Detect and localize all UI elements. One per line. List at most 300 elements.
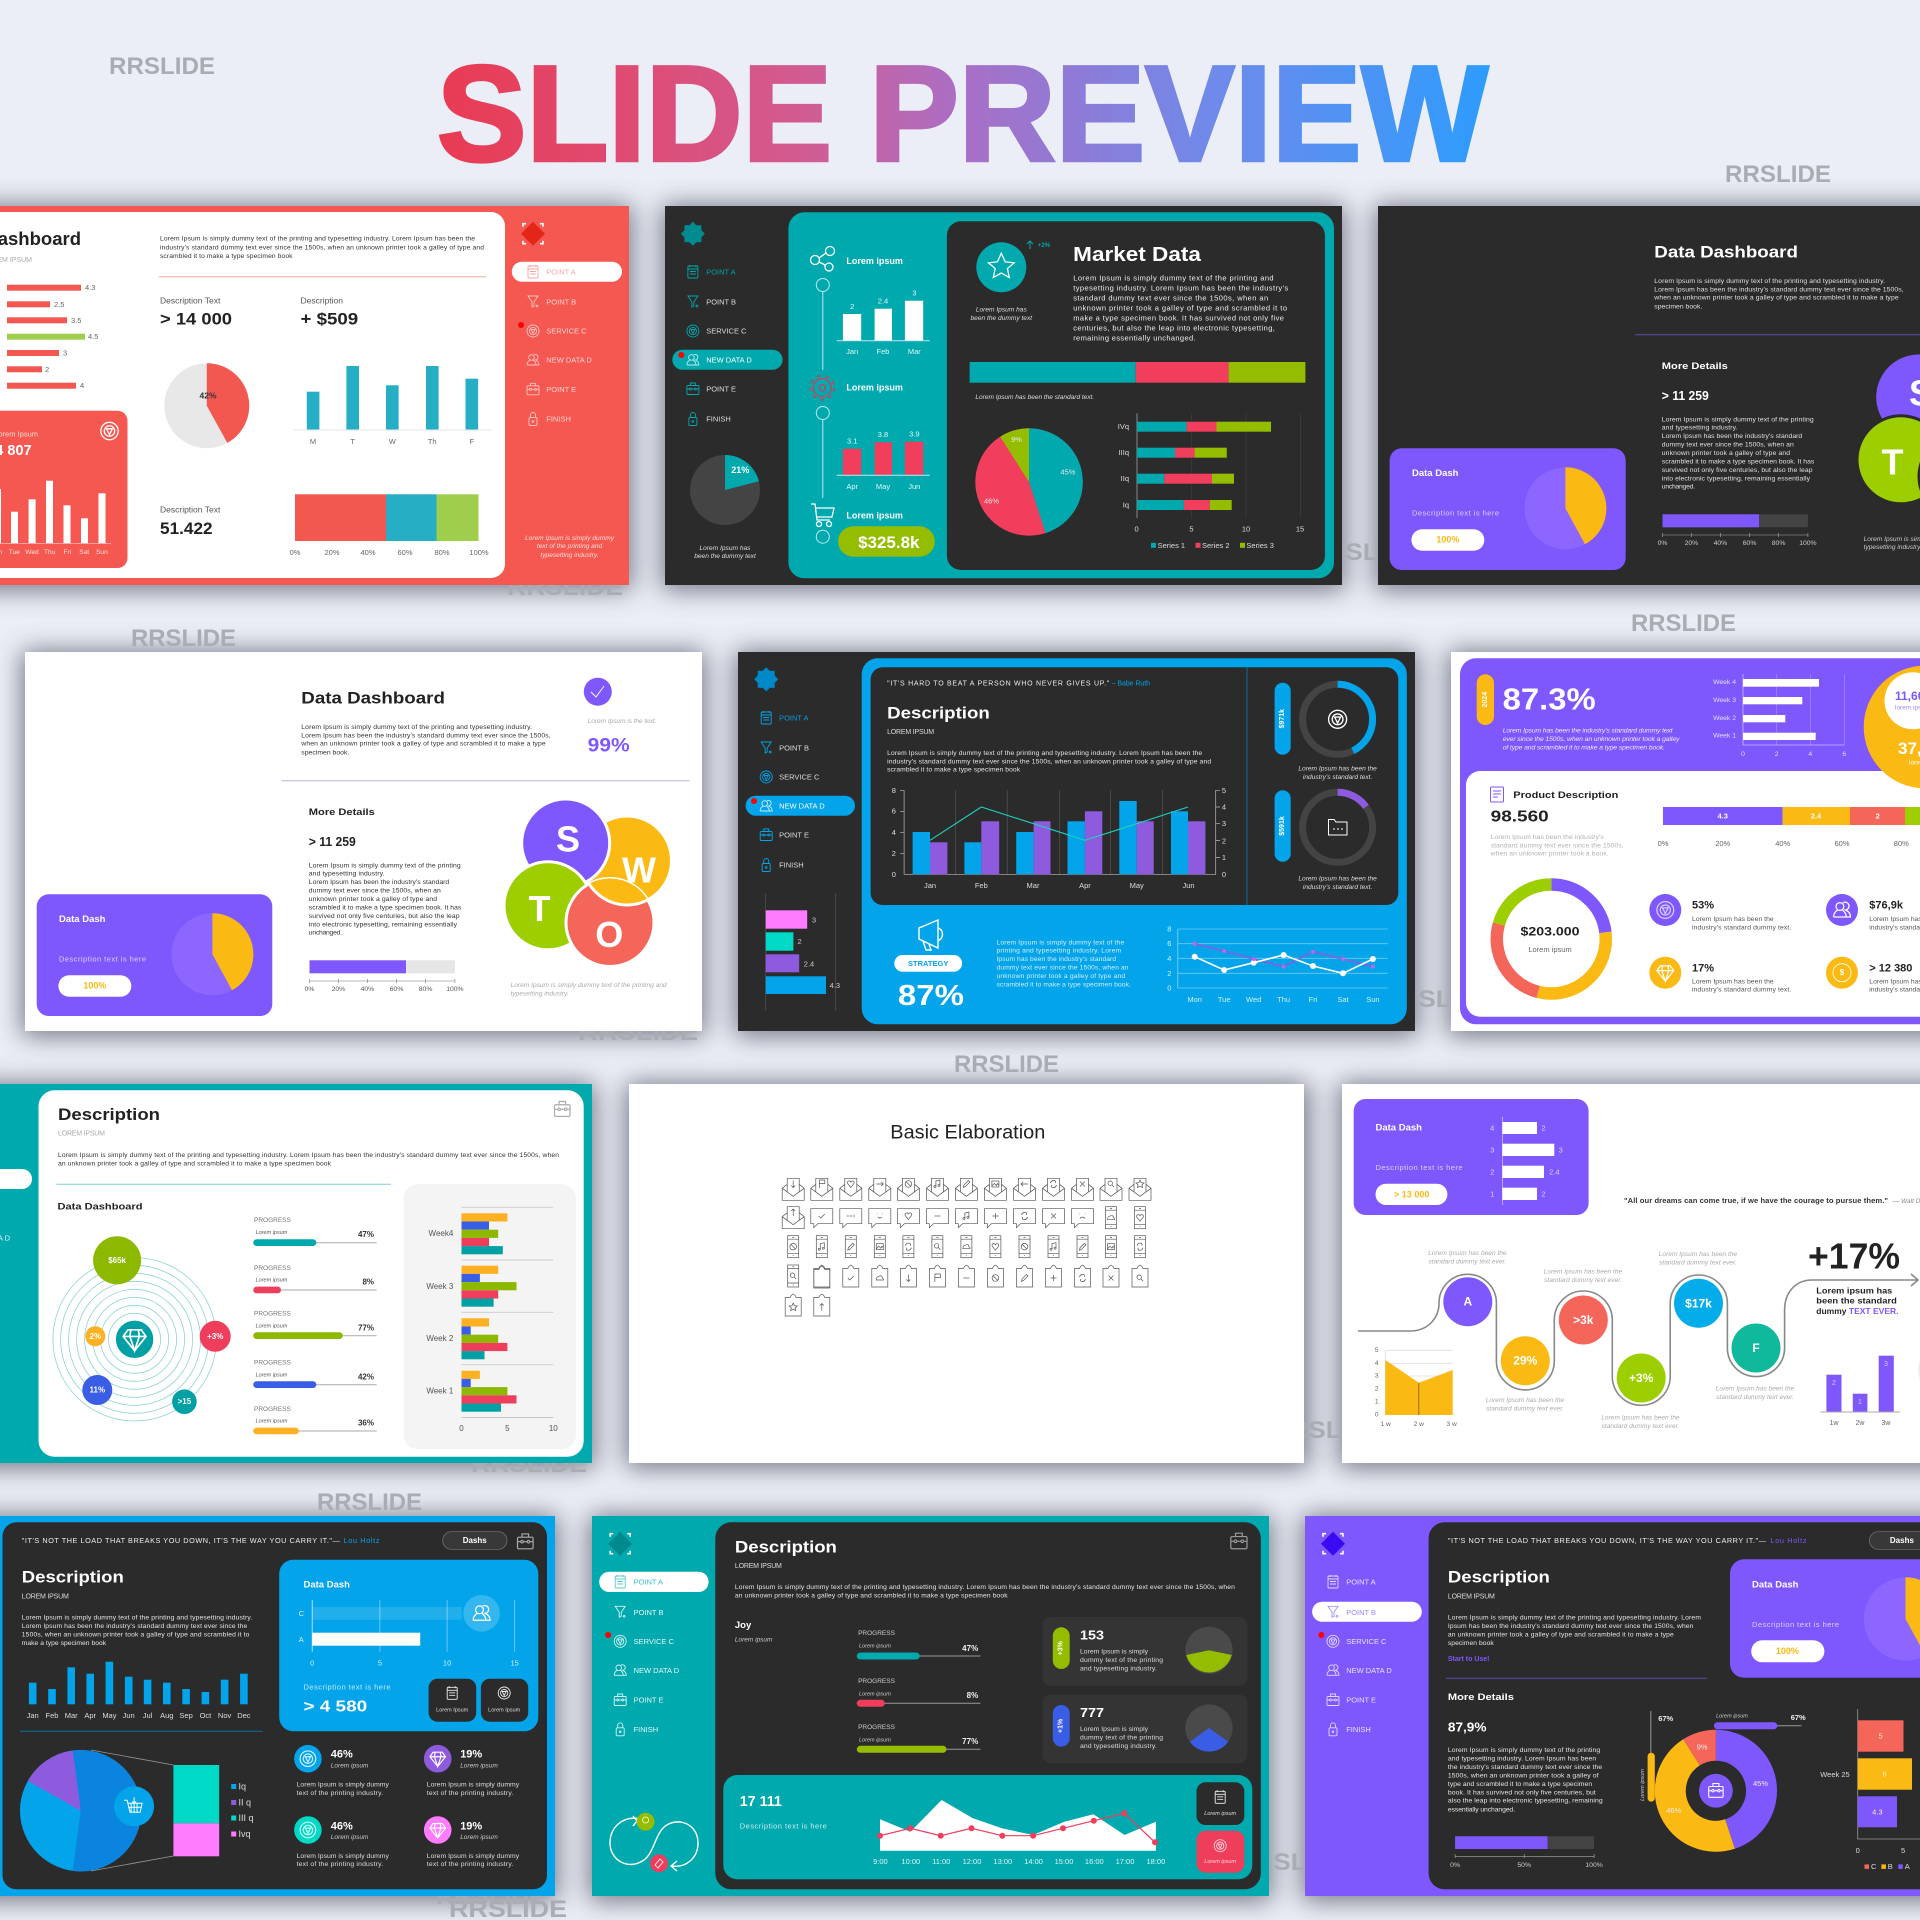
text block: intro [1653, 278, 1904, 310]
bar chart: week 25: 6 [1883, 1770, 1887, 1778]
stacked bar: 4.3 [1717, 812, 1728, 820]
stat items: 17% [1692, 962, 1714, 974]
stacked bar chart: 100% [469, 548, 489, 557]
stat items: Lorem ipsum [460, 1834, 498, 1841]
diagram: SWOT bubbles [1857, 353, 1920, 520]
navigation: left menu: POINT E [779, 830, 809, 840]
bar chart: quarterly stacked: 15 [1296, 524, 1304, 534]
card: 777: 777 [1080, 1705, 1104, 1720]
timeline captions: standard dummy text ever. [1486, 1406, 1564, 1412]
progress list: Lorem ipsum [859, 1738, 891, 1744]
card: data dash with bars: Description text is here [1376, 1163, 1462, 1172]
stacked bar [970, 362, 1305, 401]
combo chart: 5 [1222, 786, 1226, 795]
navigation: right menu: POINT B [546, 298, 576, 306]
navigation: left menu: SERVICE C [1346, 1637, 1387, 1646]
stat items: Lorem Ipsum is simply dummy [427, 1782, 520, 1788]
card: data dash blue: C [299, 1609, 305, 1618]
quote: "IT'S NOT THE LOAD THAT BREAKS YOU DOWN, IT'S THE WAY YOU CARRY IT."— [1448, 1536, 1767, 1545]
stat: 87.3%: Lorem Ipsum has been the industry's standard dummy text [1503, 728, 1674, 735]
stat items: Lorem Ipsum is simply dummy [297, 1853, 389, 1860]
area chart: 3 w [1446, 1421, 1457, 1428]
heading: description: LOREM IPSUM [735, 1563, 782, 1570]
text block: description: Lorem Ipsum is simply dummy text of the printing and typesetting industry. Lorem Ipsum has been the [887, 750, 1202, 757]
navigation: left menu: NEW DATA D [779, 802, 825, 810]
text block: market paragraph: Lorem Ipsum is simply dummy text of the printing and [1073, 273, 1274, 282]
text block: more details: into electronic typesetting, remaining essentially [1662, 475, 1811, 482]
combo chart: 6 [892, 806, 896, 816]
stacked bar [1658, 807, 1920, 848]
progress bar: 20% [332, 986, 345, 993]
text block: strategy: scrambled it to make a type specimen book. [996, 981, 1131, 988]
text block: more details: unchanged. [1662, 484, 1695, 491]
text block: more details: essentially unchanged. [1448, 1806, 1515, 1813]
timeline captions: Lorem Ipsum has been the [1486, 1397, 1565, 1404]
line chart: weekdays: 4 [1167, 954, 1171, 963]
stat: +17%: +17% [1808, 1235, 1900, 1276]
bar chart: months: Feb [46, 1711, 58, 1720]
bar chart: quarterly stacked: Series 3 [1246, 541, 1274, 550]
text block: more details: > 11 259 [309, 834, 356, 849]
timeline with mini bar charts: 3.9 [909, 430, 920, 438]
line chart: weekdays: Mon [1187, 995, 1202, 1004]
watermarks: RRSLIDE [317, 1489, 422, 1516]
text block: more details: scrambled it to make a type specimen book. It has [309, 905, 462, 912]
card: weekly red bars: Sat [79, 549, 89, 556]
bar chart: horizontal red bars: 4 [80, 381, 84, 390]
card: 153: Lorem Ipsum is simply [1080, 1648, 1149, 1655]
panel: teal area chart: 12:00 [963, 1857, 981, 1866]
progress list: PROGRESS [254, 1406, 292, 1413]
pie of bar chart: II q [238, 1797, 251, 1807]
button: dashs: Dashs [1890, 1536, 1914, 1545]
bar chart: purple weeks: 3w [1882, 1420, 1891, 1427]
bar chart: quarterly stacked: IIIq [1119, 448, 1129, 457]
caption: SWOT: Lorem Ipsum is simply dummy text of the printing and [511, 982, 667, 989]
bar chart: horizontal red bars: 4.5 [88, 332, 98, 341]
heading: description: make a type specimen book [22, 1640, 107, 1647]
diagram: orbit rings: 11% [90, 1386, 105, 1394]
combo chart: 3 [1222, 819, 1226, 828]
heading: description: Description [22, 1568, 124, 1587]
combo chart: Jan [924, 881, 936, 890]
line chart: weekdays: 6 [1167, 939, 1171, 948]
bar chart: horizontal red bars: 2 [45, 365, 49, 374]
donut gauge: $591k: $591k [1279, 816, 1286, 836]
text block: market paragraph: standard dummy text ever since the 1500s, when an [1073, 293, 1268, 302]
text block: intro: Lorem Ipsum has been the industry's standard dummy text ever since the 1500s, [301, 732, 551, 739]
watermarks: RRSLIDE [109, 53, 215, 80]
bar chart: weeks: Week 2 [1713, 715, 1736, 722]
bar chart: purple weeks: 2 [1832, 1380, 1836, 1387]
card: data dash with bars: Data Dash [1376, 1123, 1422, 1134]
bar chart: quarterly stacked: Iq [1123, 500, 1129, 510]
combo chart: Feb [975, 881, 988, 890]
card: data dash blue: Lorem Ipsum [488, 1707, 521, 1713]
timeline nodes: $17k [1685, 1296, 1712, 1310]
watermarks: RRSLIDE [1270, 1417, 1386, 1444]
bar chart: week 25: B [1888, 1862, 1893, 1871]
card: 153: dummy text of the printing [1080, 1657, 1163, 1664]
bar chart: weekdays: W [389, 437, 397, 446]
panel: slide 10 blue dashboard [0, 1516, 555, 1896]
bar chart: side bars: 3 [812, 916, 816, 924]
line chart: weekdays: Tue [1218, 995, 1231, 1004]
heading: description: Description [735, 1537, 837, 1556]
stat: +17%: Lorem ipsum has [1816, 1286, 1893, 1296]
quote: "All our dreams can come true, if we have the courage to pursue them." [1624, 1196, 1888, 1205]
text block: more details: and typesetting industry. [309, 871, 385, 878]
timeline with mini bar charts: Lorem ipsum [846, 383, 903, 393]
bar chart: weekdays: M [310, 437, 316, 446]
progress callouts on donut: 67% [1658, 1714, 1674, 1723]
heading: product description: standard dummy text ever since the 1500s, [1491, 842, 1624, 849]
watermarks: RRSLIDE [578, 1019, 698, 1046]
stat items: 53% [1692, 900, 1714, 912]
navigation: left menu: SERVICE C [634, 1637, 674, 1646]
button: dashs [443, 1532, 507, 1549]
pie chart: market share: 45% [1060, 468, 1076, 476]
text block: market paragraph: make a type specimen book. It has survived not only five [1073, 314, 1284, 323]
combo chart: Jun [1182, 881, 1195, 890]
progress list: PROGRESS [254, 1217, 292, 1224]
card: 777: and typesetting industry. [1080, 1743, 1157, 1750]
watermarks: RRSLIDE [1380, 986, 1496, 1013]
progress list: 47% [962, 1644, 978, 1653]
text block: strategy: printing and typesetting industry. Lorem [996, 948, 1122, 955]
card: 153: 153 [1080, 1627, 1104, 1642]
stat items: Lorem Ipsum has been the [1692, 916, 1774, 923]
bar chart: side bars: 2.4 [804, 960, 814, 968]
bar chart: weeks: 6 [1842, 751, 1846, 758]
pie chart: 42%: 42% [199, 391, 217, 401]
line chart: weekdays: 2 [1167, 969, 1171, 978]
stacked bar: 2 [1876, 812, 1880, 820]
stat: 99%: Lorem Ipsum is the text. [588, 718, 657, 725]
text block: more details: the industry's standard dummy text ever since the [1448, 1764, 1602, 1771]
stat items: Lorem Ipsum is simply dummy [427, 1853, 520, 1860]
text block: more details: survived not only five centuries, but also the leap [309, 913, 460, 920]
navigation: left menu: POINT B [634, 1608, 663, 1617]
timeline captions: standard dummy text ever. [1659, 1260, 1737, 1266]
navigation: left menu: POINT E [706, 384, 736, 394]
bar chart: purple weeks: 2w [1856, 1420, 1865, 1427]
quote: "IT'S HARD TO BEAT A PERSON WHO NEVER GIVES UP." [887, 680, 1110, 688]
card: data dash with bars [1354, 1099, 1589, 1215]
bar chart: weeks grouped: Week 1 [426, 1386, 454, 1396]
combo chart: 1 [1222, 853, 1226, 862]
timeline nodes: +3% [1629, 1371, 1654, 1385]
pie of bar chart: Iq [238, 1781, 246, 1791]
line chart: weekdays: Sat [1337, 995, 1350, 1004]
text block: more details: unknown printer took a galley of type and [1662, 450, 1790, 457]
bar chart: weekdays [294, 366, 492, 446]
timeline with mini bar charts [810, 246, 935, 557]
quote: Lou Holtz [1770, 1536, 1807, 1545]
watermarks: RRSLIDE [1631, 610, 1736, 637]
caption: SWOT: typesetting industry. [511, 990, 569, 998]
stacked bar chart: 80% [434, 548, 450, 557]
navigation: left menu: POINT E [1346, 1696, 1376, 1704]
icon grid [782, 1178, 1151, 1316]
stat items: > 12 380 [1869, 962, 1912, 974]
bar chart: weeks: Week 4 [1713, 679, 1736, 686]
bar chart: weeks grouped: 5 [505, 1424, 510, 1433]
bar chart: horizontal red bars: 3 [63, 348, 67, 358]
text block: more details: unknown printer took a galley of type and [309, 896, 437, 903]
navigation: left menu: FINISH [1346, 1725, 1371, 1734]
heading: description: LOREM IPSUM [887, 729, 934, 736]
line chart: weekdays: Wed [1246, 995, 1261, 1004]
area chart: 1 w [1381, 1421, 1391, 1428]
card: data dash: Data Dash [1412, 468, 1459, 479]
timeline nodes: A [1463, 1295, 1472, 1309]
card: data dash with bars: 2 [1490, 1168, 1494, 1176]
bar chart: months: Mar [65, 1711, 78, 1720]
bar chart: quarterly stacked: IVq [1118, 422, 1129, 431]
text: joy [735, 1620, 773, 1644]
stat items: Lorem ipsum [460, 1762, 498, 1770]
bar chart: side bars [766, 893, 840, 1011]
panel: slide 9 timeline [1342, 1084, 1920, 1463]
stat items: industry's standard dummy text. [1692, 987, 1791, 994]
timeline with mini bar charts: Mar [908, 347, 921, 356]
text block: more details: Lorem Ipsum is simply dummy text of the printing [309, 862, 461, 869]
bar chart: weeks grouped: 10 [549, 1424, 558, 1433]
stat: +17%: dummy TEXT EVER. [1816, 1306, 1898, 1316]
timeline with mini bar charts: 3.8 [878, 430, 888, 439]
big yellow circle stat [1864, 666, 1920, 788]
card: weekly red bars: Fri [63, 549, 72, 556]
timeline with mini bar charts: May [876, 482, 890, 491]
stat: 87.3%: of type and scrambled it to make a type specimen book. [1503, 744, 1665, 751]
navigation: left menu: POINT A [779, 714, 809, 722]
stats: description values: Description [300, 295, 343, 305]
progress bar: 0% [305, 986, 314, 993]
stat: 51.422: Description Text [160, 504, 221, 514]
stat: 99%: 99% [588, 736, 630, 757]
heading: product description [1490, 787, 1624, 858]
text block: description: industry's standard dummy text ever since the 1500s, when an unknown printer took a galley of type and [887, 758, 1211, 765]
bar chart: week 25 [1820, 1709, 1920, 1871]
bar chart: months: Aug [160, 1711, 173, 1720]
bar chart: months: May [102, 1711, 117, 1720]
text block: more details: survived not only five centuries, but also the leap [1662, 467, 1813, 474]
navigation: left menu: FINISH [634, 1725, 658, 1734]
stacked bar: Lorem Ipsum has been the standard text. [975, 394, 1094, 401]
diagram: SWOT bubbles: S [556, 818, 580, 860]
stat items: Lorem ipsum [331, 1834, 369, 1841]
stat: 51.422: 51.422 [160, 520, 213, 538]
bar chart: quarterly stacked: IIq [1121, 474, 1129, 483]
icon: star badge: been the dummy text [971, 315, 1033, 322]
bar chart: weeks grouped: 0 [459, 1424, 464, 1433]
bar chart: week 25: 0 [1856, 1846, 1860, 1855]
card: data dash blue: 15 [511, 1658, 519, 1668]
navigation: right menu: FINISH [546, 414, 571, 424]
diagram: SWOT bubbles [504, 799, 672, 966]
card: data dash: Data Dash [1752, 1580, 1799, 1591]
donut chart: 46% [1666, 1806, 1682, 1815]
card: data dash [1730, 1559, 1920, 1678]
stacked bar: 80% [1894, 839, 1909, 848]
text block: intro: when an unknown printer took a galley of type and scrambled it to make a type [300, 741, 546, 748]
progress bar: 100% [1799, 540, 1817, 547]
navigation: right menu: SERVICE C [546, 326, 587, 336]
stat: 87.3%: ever since the 1500s, when an unknown printer took a galley [1503, 736, 1680, 743]
heading: dashboard [0, 228, 81, 264]
donut gauge: $591k [1275, 790, 1377, 891]
progress list: Lorem ipsum [256, 1278, 288, 1284]
line chart: weekdays: Thu [1277, 995, 1290, 1004]
combo chart: 4 [892, 828, 896, 837]
pie chart: market share: 46% [984, 496, 999, 506]
bar chart: horizontal red bars [7, 283, 98, 390]
heading: product description: Lorem Ipsum has been the industry's [1491, 834, 1604, 841]
panel: slide 6 purple KPI [1451, 652, 1920, 1031]
text block: more details: More Details [309, 807, 375, 818]
card: data dash blue: 0 [310, 1658, 314, 1668]
text block: intro: Lorem Ipsum is simply dummy text of the printing and typesetting industry. [1654, 278, 1885, 285]
progress callouts on donut: Lorem ipsum [1640, 1769, 1646, 1801]
panel: slide 1 red dashboard [0, 206, 629, 585]
heading: description: an unknown printer took a galley of type and scrambled it to make a type specimen book [58, 1161, 332, 1168]
text block: more details: 87,9% [1448, 1720, 1487, 1735]
panel: slide 8 basic elaboration [629, 1084, 1304, 1463]
text block: more details: also the leap into electronic typesetting, remaining [1448, 1798, 1603, 1805]
heading: product description: Product Description [1513, 790, 1619, 801]
quote: Lou Holtz [344, 1536, 380, 1545]
progress list: Lorem ipsum [859, 1644, 891, 1650]
card: weekly red bars [0, 411, 128, 568]
progress list: Lorem ipsum [256, 1373, 288, 1379]
navigation: right menu: POINT A [546, 268, 576, 276]
stat items: Lorem Ipsum has been the [1692, 978, 1774, 985]
progress list: PROGRESS [858, 1678, 896, 1685]
text block: strategy: unknown printer took a galley of type and [996, 973, 1125, 980]
timeline nodes [1443, 1277, 1780, 1402]
heading: description: specimen book [1448, 1640, 1494, 1647]
title: SLIDE PREVIEW [437, 38, 1489, 190]
navigation: right menu: typesetting industry. [540, 552, 599, 559]
pie of bar chart: Ivq [238, 1829, 251, 1839]
bar chart: purple weeks [1820, 1343, 1920, 1427]
card: data dash blue: > 4 580 [304, 1699, 367, 1716]
progress bar: 0% [1450, 1862, 1460, 1869]
progress bar [1450, 1836, 1603, 1869]
timeline with mini bar charts: 3 [912, 288, 916, 298]
navigation: left menu: POINT B [779, 744, 809, 752]
navigation: right menu: POINT E [546, 385, 576, 394]
watermarks: RRSLIDE [507, 574, 623, 601]
bar chart: purple weeks: 1 [1858, 1399, 1862, 1406]
card: data dash blue: 10 [443, 1658, 451, 1668]
bar chart: quarterly stacked: 10 [1242, 524, 1250, 534]
card: data dash: Description text is here [1752, 1620, 1839, 1629]
panel: teal area chart: 16:00 [1085, 1857, 1104, 1866]
bar chart: weeks grouped: Week4 [429, 1229, 454, 1238]
panel: teal area chart: Lorem ipsum [1204, 1811, 1237, 1817]
text block: intro: when an unknown printer took a galley of type and scrambled it to make a type [1653, 295, 1899, 302]
pie chart: 21% [690, 455, 760, 560]
progress callouts on donut: 67% [1791, 1713, 1806, 1722]
bar chart: quarterly stacked: Series 2 [1202, 541, 1230, 550]
heading: product description: when an unknown printer took a book. [1490, 851, 1609, 858]
combo chart: May [1130, 881, 1144, 890]
stacked bar chart: 40% [360, 548, 376, 557]
bar chart: side bars: 2 [798, 937, 802, 946]
card: data dash: Data Dash [59, 914, 106, 925]
heading: description: Lorem Ipsum is simply dummy text of the printing and typesetting industry. Lorem Ipsum has been the industry's standard dummy text ever since the 1500s, when [735, 1584, 1235, 1591]
stat: 99% [584, 678, 657, 757]
bar chart: months: Jun [123, 1711, 135, 1720]
stat items: 19% [460, 1820, 482, 1832]
area chart: 2 [1375, 1386, 1379, 1392]
navigation: left menu: NEW DATA D [706, 356, 752, 364]
donut chart [1640, 1711, 1806, 1836]
combo chart: 8 [892, 786, 896, 795]
heading: description: Lorem Ipsum is simply dummy text of the printing and typesetting industry. [22, 1615, 252, 1622]
card: data dash blue: Data Dash [304, 1580, 350, 1591]
area chart: 4 [1375, 1360, 1379, 1367]
bar chart: months: Jan [27, 1711, 39, 1720]
card: data dash blue: 5 [378, 1658, 382, 1668]
progress bar: 60% [390, 986, 403, 993]
bar chart: months: Nov [218, 1711, 232, 1720]
text block: strategy: Ipsum has been the industry's standard [996, 956, 1116, 963]
navigation: left menu: POINT A [706, 268, 736, 276]
navigation: right menu [512, 222, 622, 559]
bar chart: weeks [1713, 674, 1846, 758]
diagram: orbit rings: Data Dashboard [58, 1201, 143, 1212]
icon: briefcase [518, 1534, 533, 1549]
progress callouts on donut [1640, 1711, 1806, 1802]
text block: strategy: dummy text ever since the 1500s, when an [996, 965, 1129, 972]
quote: – Babe Ruth [1112, 680, 1150, 688]
card: weekly red bars: Sun [96, 549, 108, 556]
icon: briefcase [1231, 1533, 1247, 1549]
text block: more details: and typesetting industry. [1662, 425, 1738, 432]
stat items: 19% [460, 1748, 482, 1760]
card: data dash with bars: 1 [1490, 1190, 1494, 1198]
stat items: text of the printing industry. [297, 1861, 383, 1868]
bar chart: week 25: 4.3 [1872, 1808, 1883, 1816]
text block: market paragraph: centuries, but also the leap into electronic typesetting, [1073, 324, 1275, 333]
stat items: Lorem Ipsum is simply dummy [297, 1782, 389, 1788]
bar chart: quarterly stacked: Series 1 [1158, 541, 1185, 550]
icon: star badge: +2% [1038, 243, 1051, 249]
bar chart: weeks: 4 [1808, 751, 1812, 758]
panel: slide 12 purple dark [1305, 1516, 1920, 1896]
progress bar: 100% [1585, 1862, 1603, 1869]
text block: more details: type and scrambled it to make a type specimen [1448, 1781, 1592, 1788]
text block: strategy [996, 939, 1131, 988]
timeline nodes: 29% [1513, 1354, 1538, 1368]
panel: slide 7 teal description [0, 1084, 592, 1463]
diagram: orbit rings: +3% [207, 1332, 223, 1341]
bar chart: months: Dec [237, 1711, 251, 1720]
stats: description values: + $509 [300, 310, 358, 328]
progress list: 8% [362, 1278, 374, 1286]
stat items [294, 1745, 520, 1868]
stacked bar chart [290, 494, 489, 557]
heading: product description: 98.560 [1491, 809, 1549, 826]
watermarks: RRSLIDE [954, 1051, 1059, 1078]
panel: slide 2 market data [665, 206, 1342, 585]
card: weekly red bars: Tue [9, 549, 20, 556]
heading: description [22, 1568, 252, 1647]
line chart: weekdays: Sun [1366, 995, 1380, 1004]
